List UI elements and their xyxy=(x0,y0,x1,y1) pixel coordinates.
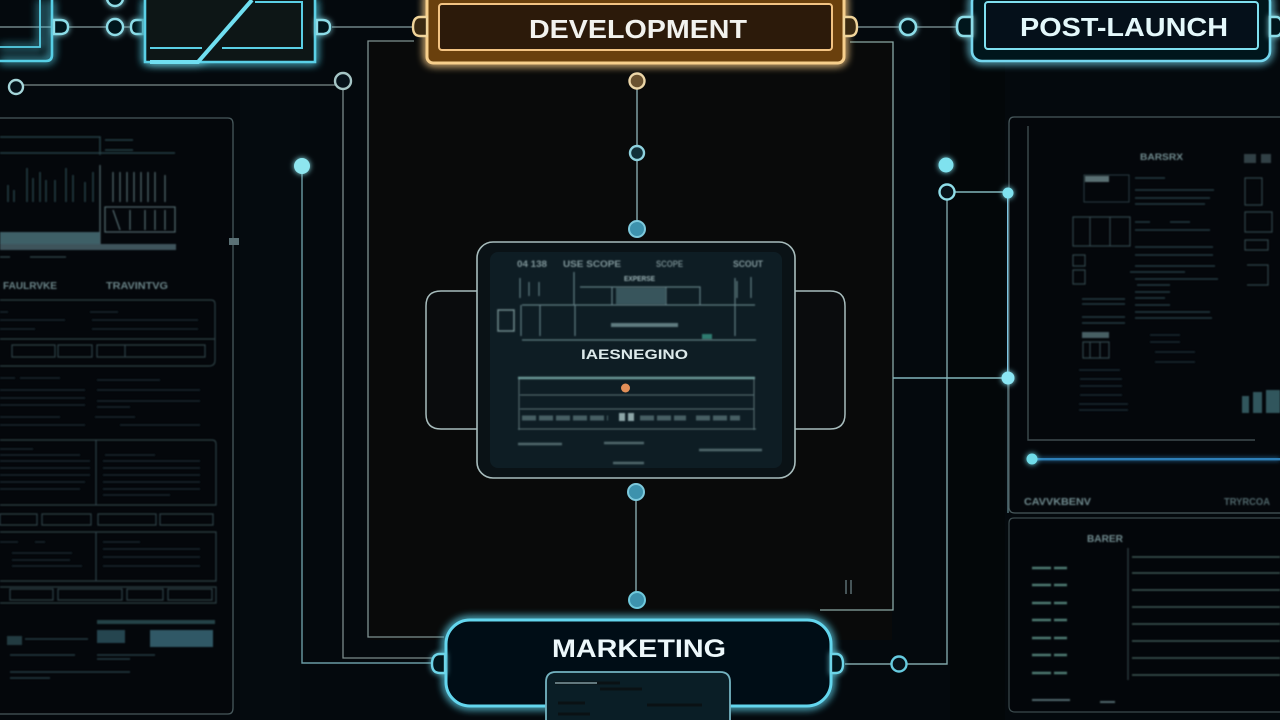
box: Marketing xyxy=(446,620,831,720)
dot: tablet orange marker xyxy=(621,384,630,392)
icon: second stage connector xyxy=(317,20,330,34)
block: left table two xyxy=(0,440,216,603)
box: Post-launch xyxy=(972,0,1270,61)
block: left footer xyxy=(7,622,215,678)
nodes: small circles xyxy=(9,73,1014,672)
label: left report columns xyxy=(3,280,168,292)
panel: left report xyxy=(0,118,239,714)
block: tablet lower schematic xyxy=(518,378,762,463)
block: tablet upper schematic: 04 138 xyxy=(517,259,547,270)
block: tablet upper schematic: SCOUT xyxy=(733,259,763,270)
chart: left report bars xyxy=(0,137,176,257)
box: second stage cropped xyxy=(145,0,315,62)
label: right table heading: BARER xyxy=(1087,534,1124,545)
label: right report columns xyxy=(1024,496,1270,508)
panel: Marketing inset xyxy=(546,672,730,720)
panel: right report xyxy=(1009,117,1280,513)
label: Post-launch: POST-LAUNCH xyxy=(1020,12,1228,42)
block: left table one xyxy=(0,300,215,425)
label: left report columns: TRAVINTVG xyxy=(106,280,168,292)
label: right report heading: BARSRX xyxy=(1140,152,1184,163)
label: right report columns: TRYRCOA xyxy=(1224,496,1270,508)
connector lines xyxy=(0,27,1008,664)
progress line xyxy=(1026,454,1280,464)
chart: right table rows xyxy=(1032,548,1280,702)
box: Development xyxy=(427,0,844,63)
label: Development: DEVELOPMENT xyxy=(529,14,747,44)
label: right report columns: CAVVKBENV xyxy=(1024,496,1091,508)
label: tablet centre: IAESNEGINO xyxy=(581,346,688,362)
icon: Post-launch connectors xyxy=(900,17,1280,36)
block: tablet upper schematic: SCOPE xyxy=(656,259,683,270)
block: right report details xyxy=(1073,154,1280,413)
box: top left cropped stage xyxy=(0,0,52,61)
side tabs xyxy=(426,291,845,429)
icon: Marketing connectors xyxy=(432,654,843,673)
block: tablet upper schematic xyxy=(498,259,763,340)
block: tablet upper schematic: EXPERSE xyxy=(624,276,655,283)
block: tablet upper schematic: USE SCOPE xyxy=(563,259,621,270)
icon: top left connectors xyxy=(54,0,143,35)
icon: small marker lower right xyxy=(846,580,851,594)
label: Marketing: MARKETING xyxy=(552,635,726,663)
label: left report columns: FAULRVKE xyxy=(3,280,57,292)
panel: right table xyxy=(1009,518,1280,712)
icon: Development connectors xyxy=(413,17,857,36)
panel: central tablet xyxy=(426,242,845,478)
